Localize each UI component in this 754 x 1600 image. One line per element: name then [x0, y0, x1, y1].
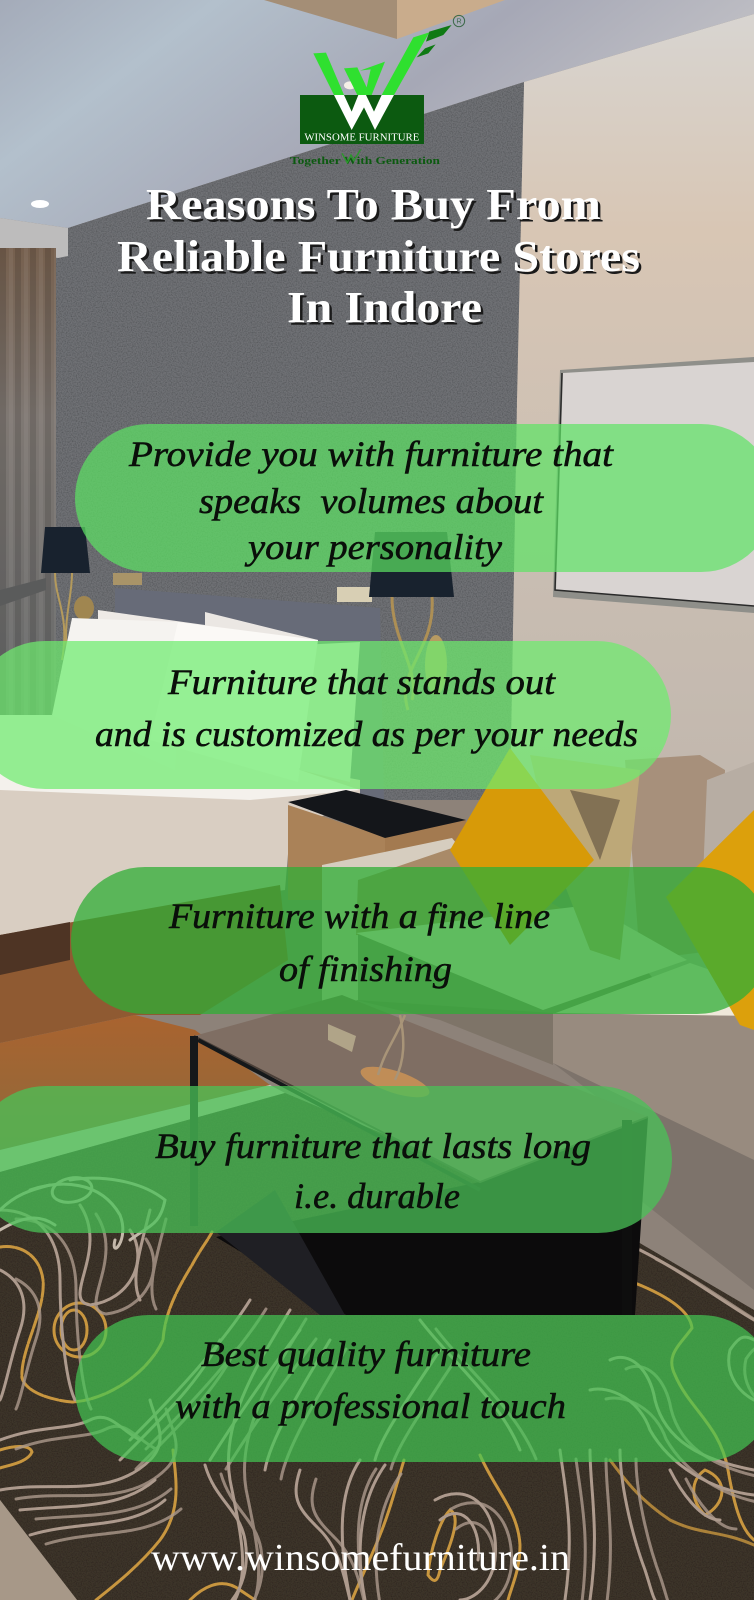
panel: reason 1 [75, 424, 754, 572]
panel: reason 2: and is customized as per your needs [95, 714, 638, 754]
panel: reason 1: your personality [245, 527, 502, 567]
logo: Winsome Furniture [290, 15, 465, 167]
panel: reason 3: of finishing [279, 949, 452, 989]
rug contour pattern [0, 1175, 754, 1600]
panel: reason 4: i.e. durable [294, 1176, 460, 1216]
panel: reason 2: Furniture that stands out [167, 662, 556, 702]
panel: reason 5 [75, 1315, 754, 1462]
panel: reason 5: with a professional touch [175, 1386, 566, 1426]
panel: reason 4: Buy furniture that lasts long [155, 1126, 591, 1166]
title: Reasons To Buy From [146, 180, 601, 229]
title: Reasons To Buy From [148, 182, 604, 232]
logo: Winsome Furniture: WINSOME FURNITURE [304, 132, 420, 144]
coffee table [190, 995, 648, 1315]
title: Reliable Furniture Stores [117, 232, 640, 281]
panel: reason 3: Furniture with a fine line [168, 896, 550, 936]
title: In Indore [287, 283, 482, 332]
panel: reason 5: Best quality furniture [201, 1334, 531, 1374]
title: Reliable Furniture Stores [120, 234, 642, 284]
logo: Winsome Furniture: R [456, 17, 462, 26]
title [117, 180, 642, 334]
website url: www.winsomefurniture.in [151, 1537, 570, 1579]
panel: reason 1: speaks volumes about [199, 481, 544, 521]
panel: reason 3 [71, 867, 754, 1014]
title: In Indore [290, 286, 484, 334]
panel: reason 2 [0, 641, 671, 789]
logo: Winsome Furniture: Together With Generation [290, 156, 441, 167]
panel: reason 4 [0, 1086, 672, 1233]
panel: reason 1: Provide you with furniture that [128, 434, 614, 474]
